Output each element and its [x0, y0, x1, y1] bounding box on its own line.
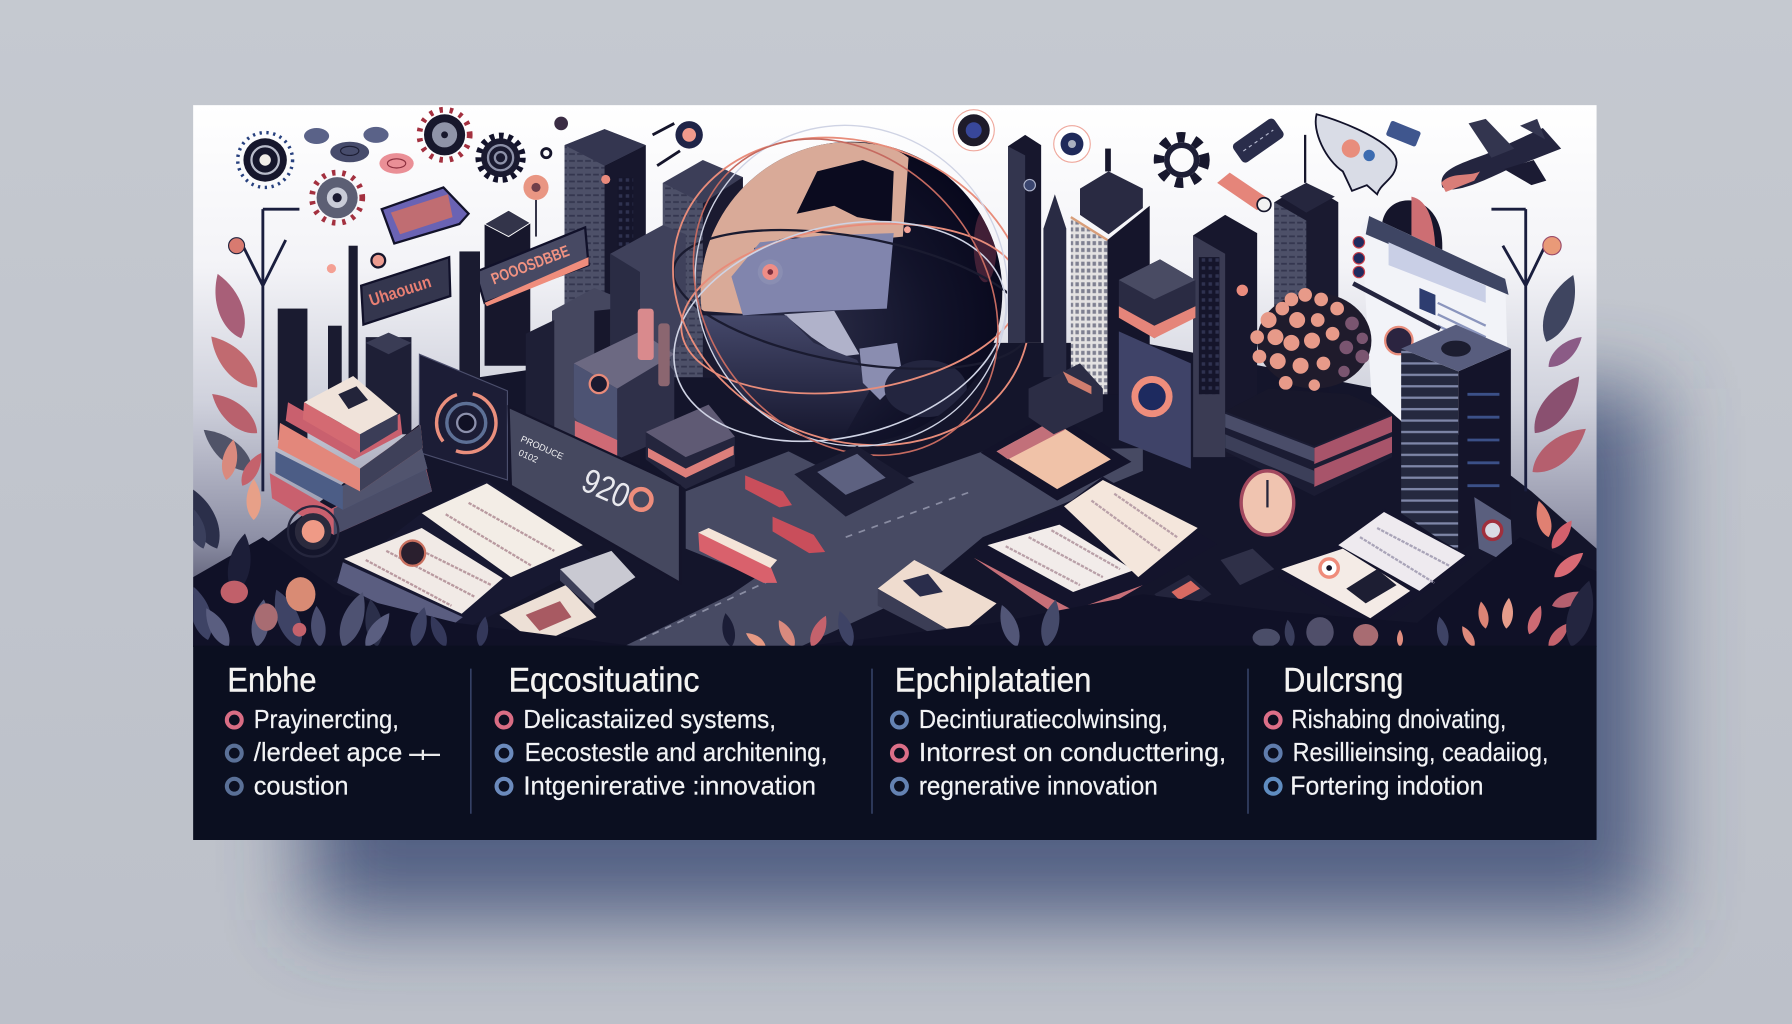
illustration: book planter — [1225, 389, 1392, 496]
icon: black gear wheel — [1159, 137, 1205, 183]
book stack — [270, 376, 432, 535]
panel: isometric city illustration — [177, 68, 1601, 651]
bus: middle — [773, 517, 825, 553]
device: cassette box — [1029, 363, 1103, 434]
column heading: Eqcosituatinc — [509, 661, 699, 699]
sign: right billboard: POOOSDBBE — [489, 243, 572, 288]
building: block by the globe — [663, 160, 743, 377]
dark scene base — [193, 343, 1597, 647]
globe lower right patch — [885, 360, 967, 417]
platform chip — [794, 446, 914, 517]
globe continent: peach limb — [700, 142, 909, 314]
column heading: Enbhe — [227, 661, 317, 699]
bullet item: Fortering indotion — [1290, 770, 1483, 800]
orbit nodes — [904, 226, 911, 233]
column heading: Dulcrsng — [1283, 661, 1403, 699]
globe continent: central america — [784, 311, 859, 357]
box: by book — [560, 551, 635, 610]
device: tablet — [981, 411, 1131, 501]
column: Enbhe — [227, 661, 440, 800]
globe continent: south america — [859, 343, 903, 400]
column: Dulcrsng — [1266, 661, 1549, 800]
icon: speech bubble — [1316, 114, 1397, 194]
icon: purple neon badge — [382, 187, 469, 243]
globe orbit rings — [672, 124, 1028, 456]
foliage: right side plant — [1491, 209, 1593, 491]
open book: left — [333, 480, 600, 642]
column: Epchiplatatien — [892, 661, 1226, 800]
bullet item: Intgenirerative :innovation — [523, 770, 816, 800]
device: box above ring panel — [1119, 259, 1195, 338]
icon: airplane — [1441, 119, 1561, 192]
card drop shadow — [306, 389, 1655, 920]
icon: arch dial — [1382, 197, 1442, 274]
building: tall left tower — [564, 129, 646, 304]
column heading: Epchiplatatien — [895, 661, 1091, 699]
globe lower slate — [702, 315, 870, 418]
icon: red spiked gear top — [419, 110, 470, 160]
monitor: dashboard: 0102 — [517, 448, 540, 465]
monitor: dashboard: 920 — [576, 462, 635, 516]
globe maroon patch — [974, 209, 997, 282]
bullet item: Resillieinsing, ceadaiiog, — [1293, 737, 1549, 767]
divider lines — [471, 669, 1248, 814]
icon: small badge — [1386, 120, 1421, 147]
open book: centre — [974, 477, 1217, 626]
bullet item: Prayinercting, — [254, 704, 399, 734]
icon: capsule tag — [1232, 118, 1284, 163]
globe marker — [758, 259, 783, 285]
device: small speaker — [1474, 497, 1513, 566]
foliage: left side plant — [197, 209, 299, 491]
illustration: globe — [672, 124, 1028, 456]
panel: browser window — [1353, 216, 1509, 425]
icon: floating discs — [304, 127, 414, 174]
bullet item: Decintiuratiecolwinsing, — [919, 704, 1168, 734]
panel: dark captions band — [193, 646, 1597, 840]
building: mid dark tower — [1193, 215, 1257, 457]
column: Eqcosituatinc — [497, 661, 827, 800]
bullet item: Eecostestle and architening, — [525, 737, 827, 767]
illustration: server rack — [1401, 325, 1511, 552]
foliage: bottom undergrowth — [177, 438, 1601, 651]
building: spire — [1043, 194, 1066, 377]
icon: fan panel — [419, 354, 507, 480]
small gadgets — [1120, 549, 1274, 643]
bullet item: Intorrest on conducttering, — [919, 737, 1226, 767]
booklet: lower centre — [878, 560, 997, 647]
panel: illustration card — [193, 105, 1597, 647]
building: column group — [278, 246, 480, 440]
icon: dark cog — [479, 136, 522, 179]
bus: upper — [745, 475, 792, 507]
building: rear dark tower — [1274, 135, 1338, 343]
monitor: dashboard — [509, 407, 680, 583]
globe continent: arctic — [797, 160, 894, 223]
sign: left billboard — [361, 257, 450, 325]
building: slim tower — [1008, 135, 1041, 343]
device: central machine — [574, 309, 674, 459]
icon: red spiked gear lower — [312, 173, 362, 223]
books stack middle — [646, 405, 735, 489]
sign: left billboard: Uhaouun — [366, 271, 434, 310]
icon: small rings and dots — [327, 117, 703, 273]
building: black block — [485, 210, 530, 366]
booklet: lower left — [499, 585, 597, 645]
bullet item: Delicastaiized systems, — [523, 704, 776, 734]
sign: right billboard — [475, 227, 589, 306]
icon: ringed lenses right of globe — [953, 110, 1090, 162]
icon: salmon cylinder — [1217, 173, 1271, 211]
icon: left black gear — [238, 133, 293, 187]
bus: lower — [698, 528, 777, 583]
bullet item: regnerative innovation — [919, 770, 1158, 800]
globe continent: north america — [731, 233, 894, 315]
monitor: dashboard: PRODUCE — [519, 434, 565, 462]
illustration: tree crown — [1250, 288, 1371, 429]
bullet item: /lerdeet apce — [254, 737, 402, 767]
open book: right — [1278, 509, 1472, 631]
bullet item: Rishabing dnoivating, — [1291, 704, 1506, 734]
road network — [623, 448, 1143, 647]
panel: ring display — [1119, 331, 1191, 469]
icon: gauge clock — [1241, 471, 1294, 535]
building: white window skyscraper — [1071, 149, 1150, 394]
building: mid towers — [526, 225, 686, 436]
bullet item: coustion — [254, 770, 349, 800]
